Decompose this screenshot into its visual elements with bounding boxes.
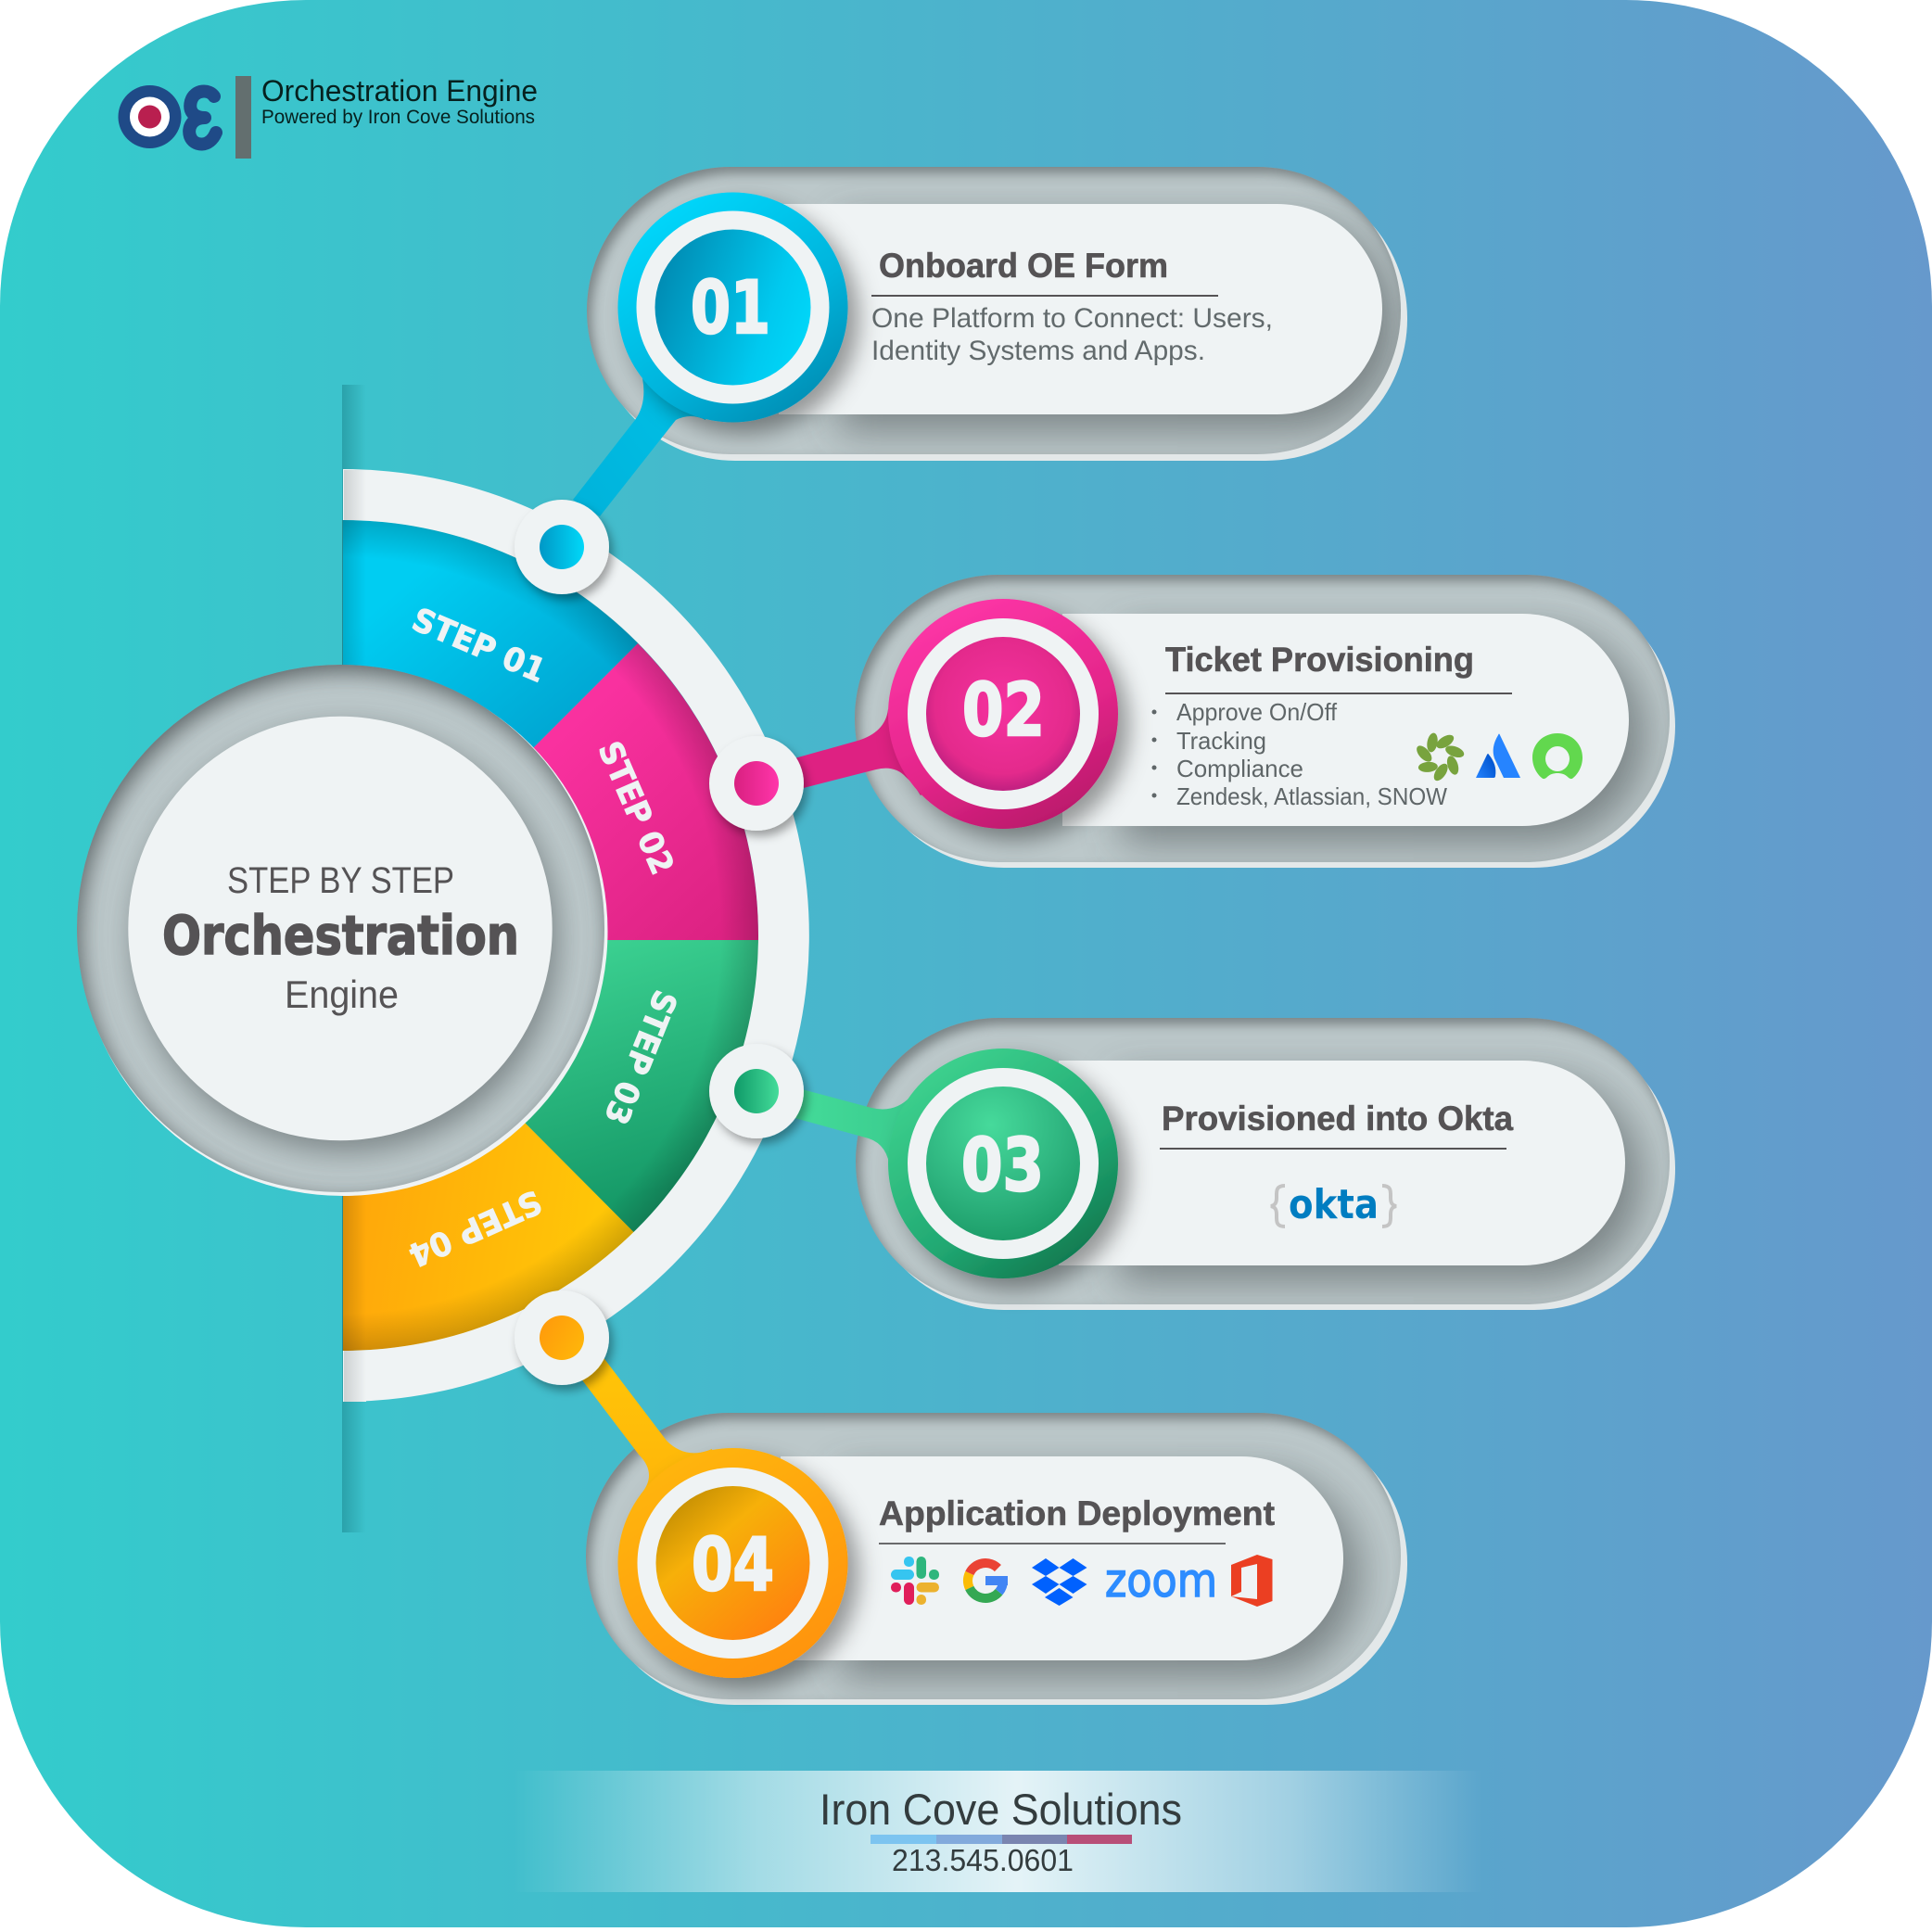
outer white ring (343, 469, 809, 1402)
chart: step sectors (342, 520, 758, 1351)
sector: step 01 (343, 520, 638, 938)
panel: card 4 application deployment (586, 1413, 1407, 1705)
card 1 title: Onboard OE Form (879, 247, 1168, 285)
connector: step 02 (788, 709, 1003, 795)
logo (119, 76, 251, 159)
label: step 03: STEP 03 (596, 985, 683, 1129)
card 2 bullet list: Compliance (1176, 755, 1303, 782)
card 2 bullet list: Zendesk, Atlassian, SNOW (1176, 782, 1447, 810)
badge: 01: 01 (691, 267, 770, 350)
icon: okta logo: okta (1289, 1181, 1379, 1228)
label: step 01: STEP 01 (406, 602, 551, 691)
node: step 02 (709, 736, 804, 831)
card 2 bullet list: Approve On/Off (1176, 698, 1338, 726)
centre heading: Orchestration (162, 904, 519, 967)
centre heading: Engine (285, 972, 399, 1016)
card 2 bullet list (1151, 698, 1447, 810)
card 2 title: Ticket Provisioning (1165, 641, 1474, 679)
logo title: Orchestration Engine (261, 74, 538, 108)
label: step 02: STEP 02 (591, 736, 680, 880)
panel: card 2 ticket provisioning (855, 575, 1675, 868)
panel: card 3 okta (856, 1018, 1675, 1310)
icon: zendesk swirl (1414, 732, 1466, 783)
footer company name: Iron Cove Solutions (820, 1785, 1182, 1834)
badge: 02: 02 (962, 669, 1045, 753)
sector: step 04 (343, 940, 634, 1351)
icon: snow ring (1532, 733, 1582, 779)
footer band (514, 1771, 1483, 1892)
node: step 03 (709, 1044, 804, 1138)
card 1 body: One Platform to Connect: Users, (871, 303, 1273, 334)
logo subtitle: Powered by Iron Cove Solutions (261, 107, 535, 128)
connector: step 01 (573, 307, 733, 516)
sector: step 03 (343, 940, 758, 1233)
label: step 04: STEP 04 (403, 1182, 547, 1273)
footer colour bar (871, 1835, 1132, 1844)
badge: 03 (888, 1049, 1118, 1278)
centre heading: STEP BY STEP (227, 860, 454, 901)
card 2 bullet list: Tracking (1176, 727, 1266, 755)
icon: atlassian (1476, 734, 1520, 778)
footer phone: 213.545.0601 (892, 1843, 1074, 1877)
badge: 02 (888, 599, 1118, 829)
icon: slack (891, 1557, 939, 1605)
badge: 03: 03 (961, 1125, 1044, 1208)
node: step 04 (515, 1290, 609, 1385)
connector: step 04 (566, 1344, 733, 1563)
card 1 body (871, 303, 1273, 366)
card 3 title: Provisioned into Okta (1162, 1099, 1513, 1138)
icon: dropbox (1032, 1558, 1087, 1606)
badge: 04: 04 (692, 1524, 774, 1608)
icon: google (968, 1563, 1008, 1598)
card 1 body: Identity Systems and Apps. (871, 336, 1205, 366)
card 4 title: Application Deployment (879, 1494, 1275, 1532)
badge: 04 (617, 1448, 847, 1678)
panel: centre disc (77, 665, 608, 1196)
panel: card 1 onboard (587, 167, 1407, 461)
icon: office (1231, 1555, 1272, 1607)
badge: 01 (617, 193, 847, 423)
vertical bar (342, 385, 366, 1532)
centre heading (162, 860, 519, 1016)
sector: step 02 (343, 643, 758, 940)
icon: zoom wordmark: zoom (1105, 1554, 1217, 1608)
connector: step 03 (788, 1086, 1003, 1170)
node: step 01 (515, 500, 609, 594)
